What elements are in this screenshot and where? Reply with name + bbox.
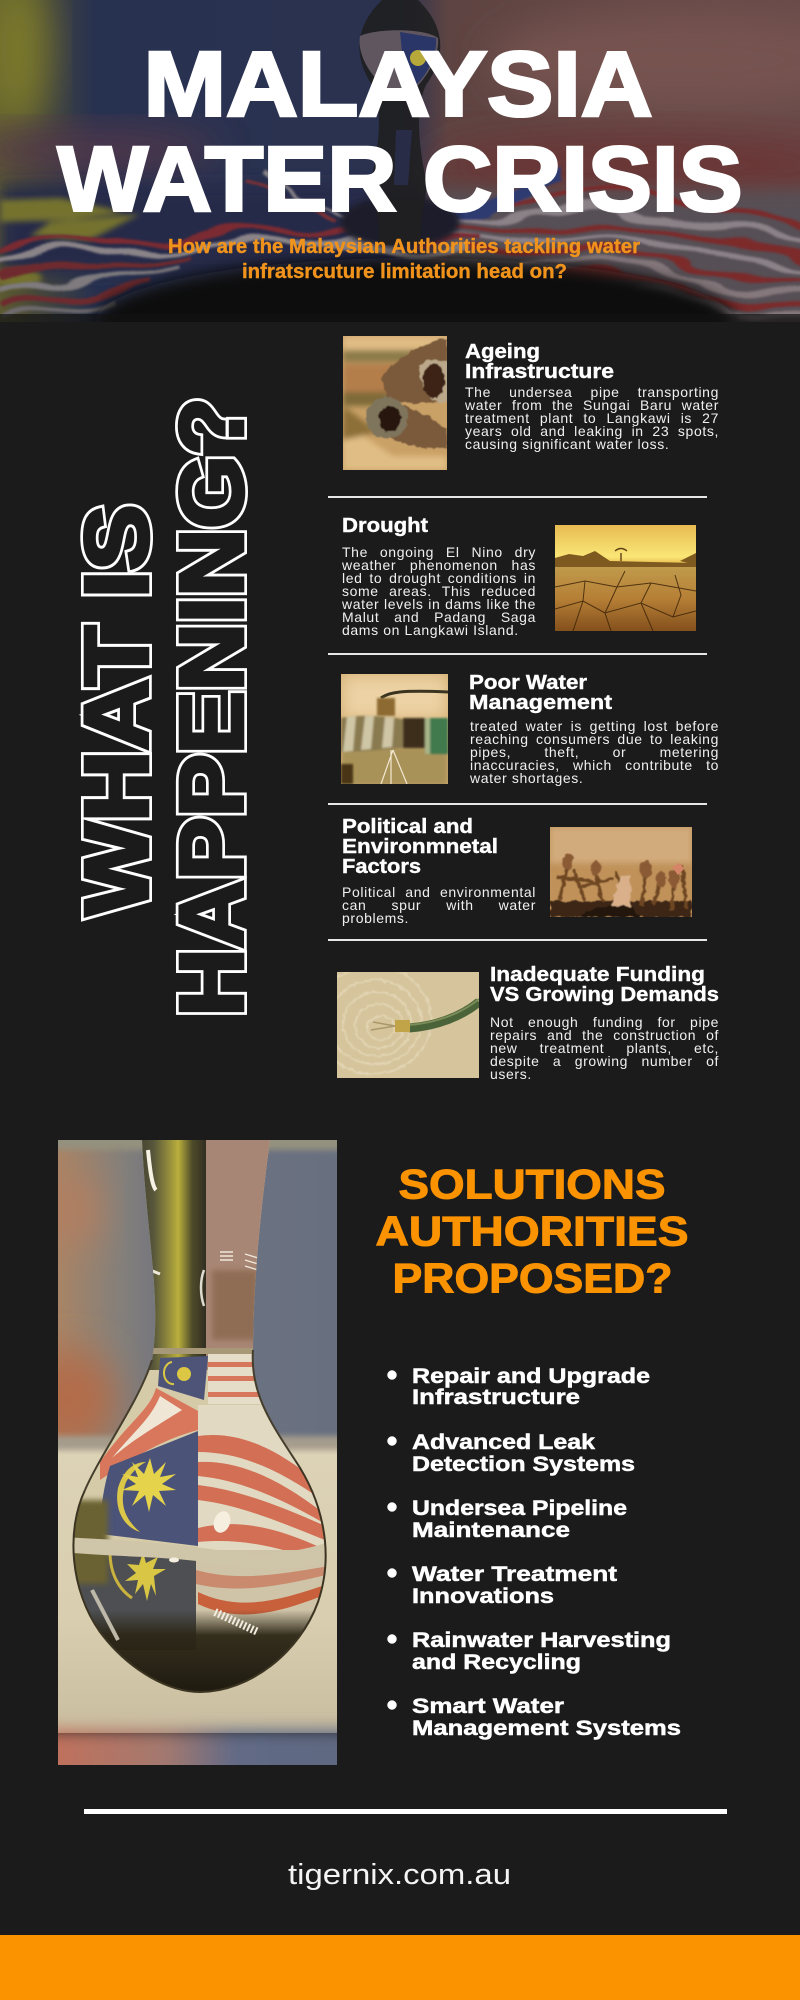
title: MALAYSIA — [144, 34, 652, 136]
item: advanced leak detection: Detection Systems — [412, 1453, 635, 1476]
description: water from the Sungai Baru water — [465, 397, 719, 413]
item: rainwater harvesting — [388, 1629, 671, 1674]
panel: inadequate funding — [315, 964, 721, 1086]
description: users. — [490, 1066, 532, 1082]
panel: ageing infrastructure — [343, 336, 721, 470]
item: smart water management — [388, 1695, 681, 1740]
heading: VS Growing Demands — [490, 984, 719, 1006]
subtitle — [168, 236, 640, 283]
panel: drought — [342, 515, 696, 640]
description: water levels in dams like the — [342, 596, 536, 612]
heading: Poor Water — [469, 672, 587, 694]
footer orange bar — [0, 1935, 800, 2000]
description: can spur with water — [342, 897, 536, 913]
heading — [342, 816, 498, 878]
subtitle: How are the Malaysian Authorities tackling water — [168, 236, 640, 258]
item: repair and upgrade — [388, 1365, 650, 1409]
item: repair and upgrade: Repair and Upgrade — [412, 1365, 650, 1388]
heading: Environmnetal — [342, 836, 498, 858]
heading — [465, 341, 614, 383]
description — [470, 720, 721, 790]
item: undersea pipeline: Maintenance — [412, 1519, 570, 1542]
item: undersea pipeline: Undersea Pipeline — [412, 1497, 627, 1520]
description — [342, 886, 538, 930]
description: led to drought conditions in — [342, 570, 536, 586]
item: rainwater harvesting: and Recycling — [412, 1651, 581, 1674]
description: despite a growing number of — [490, 1053, 719, 1069]
vertical heading: what is happening: WHAT IS — [68, 504, 168, 916]
description: dams on Langkawi Island. — [342, 622, 519, 638]
vertical heading: what is happening — [68, 398, 262, 1016]
description — [342, 546, 538, 640]
heading: Inadequate Funding — [490, 964, 705, 986]
vertical heading: what is happening: HAPPENING? — [162, 398, 262, 1016]
heading: Management — [469, 692, 612, 714]
subtitle: infratsrcuture limitation head on? — [242, 261, 567, 283]
footer website: tigernix.com.au — [288, 1859, 511, 1891]
header photo: water drop reflecting Malaysian flag — [0, 0, 800, 322]
heading — [490, 964, 719, 1006]
description: treatment plant to Langkawi is 27 — [465, 410, 719, 426]
title: WATER CRISIS — [58, 128, 742, 230]
item: repair and upgrade: Infrastructure — [412, 1386, 580, 1409]
panel: solutions heading: SOLUTIONS — [398, 1160, 666, 1208]
item: smart water management: Management Systems — [412, 1717, 681, 1740]
photo: large water drop with Malaysian flag — [58, 1140, 337, 1765]
heading: Ageing — [465, 341, 540, 363]
heading: Infrastructure — [465, 361, 614, 383]
item: advanced leak detection: Advanced Leak — [412, 1431, 595, 1454]
photo: leaking pipe — [341, 674, 448, 784]
description: problems. — [342, 910, 409, 926]
description: causing significant water loss. — [465, 436, 669, 452]
description: inaccuracies, which contribute to — [470, 757, 719, 773]
panel: political and environmental factors — [342, 816, 692, 930]
panel: header banner — [0, 0, 800, 386]
title — [58, 34, 742, 230]
item: smart water management: Smart Water — [412, 1695, 564, 1718]
heading: Political and — [342, 816, 473, 838]
photo: cracked earth — [555, 525, 696, 631]
panel: solutions heading: AUTHORITIES — [376, 1208, 688, 1254]
description: Malut and Padang Saga — [342, 609, 536, 625]
description — [465, 386, 721, 456]
panel: poor water management — [341, 672, 721, 790]
panel: solutions list — [388, 1365, 681, 1740]
description: some areas. This reduced — [342, 583, 536, 599]
panel: solutions heading — [376, 1160, 688, 1302]
photo: raised hands in dust — [550, 827, 692, 917]
item: water treatment: Innovations — [412, 1585, 554, 1608]
vertical heading: what is happening: WHAT IS — [68, 504, 168, 916]
description: weather phenomenon has — [342, 557, 536, 573]
heading: Factors — [342, 856, 421, 878]
item: advanced leak detection — [388, 1431, 635, 1476]
item: undersea pipeline — [388, 1497, 627, 1542]
panel: solutions heading: PROPOSED? — [392, 1254, 672, 1302]
description: new treatment plants, etc, — [490, 1040, 719, 1056]
photo: hose in water — [337, 972, 479, 1078]
item: water treatment: Water Treatment — [412, 1563, 617, 1586]
item: water treatment — [388, 1563, 617, 1608]
description: years old and leaking in 23 spots, — [465, 423, 719, 439]
description: pipes, theft, or metering — [470, 744, 719, 760]
description: reaching consumers due to leaking — [470, 731, 719, 747]
description — [490, 1016, 721, 1086]
description: water shortages. — [470, 770, 583, 786]
vertical heading: what is happening: HAPPENING? — [162, 398, 262, 1016]
photo: rusty pipes — [343, 336, 447, 470]
heading — [469, 672, 612, 714]
item: rainwater harvesting: Rainwater Harvesting — [412, 1629, 671, 1652]
heading: Drought — [342, 515, 428, 537]
description: repairs and the construction of — [490, 1027, 719, 1043]
